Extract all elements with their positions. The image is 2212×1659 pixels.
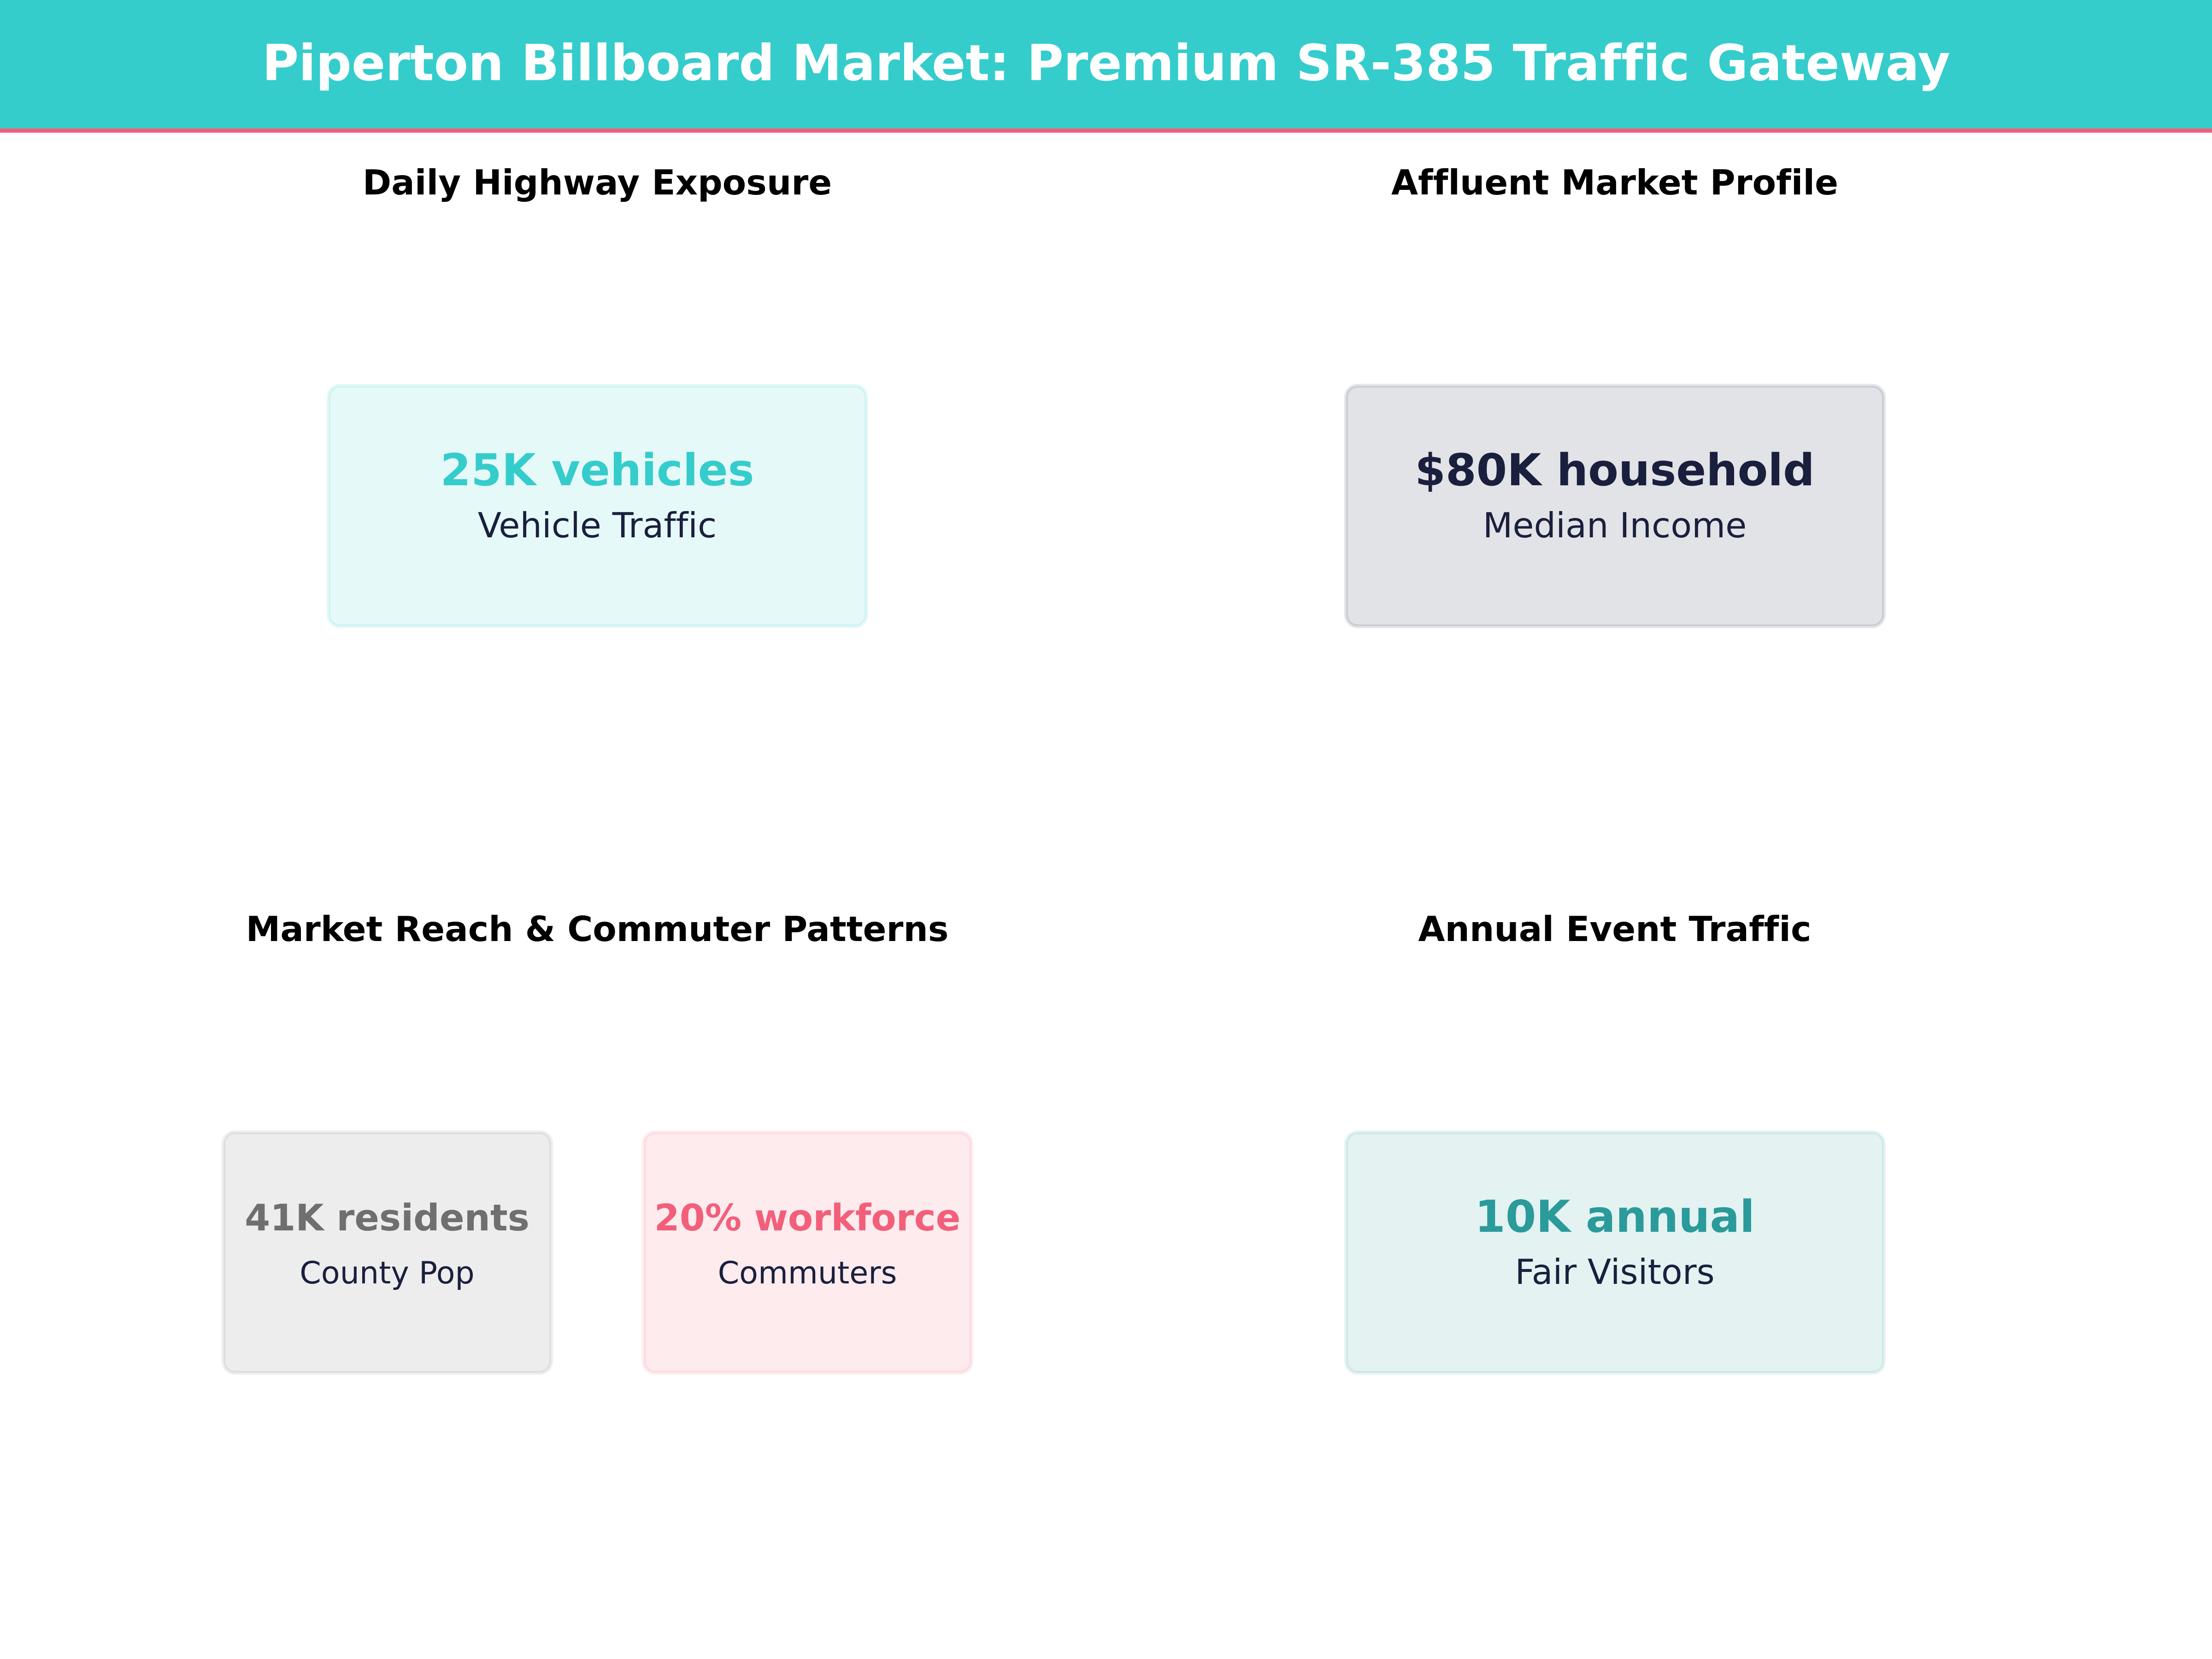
stat card: median income: $80K household bbox=[1415, 444, 1815, 496]
panel: daily highway exposure bbox=[329, 162, 866, 626]
stat card: commuters: Commuters bbox=[718, 1255, 897, 1291]
heading: market reach and commuter patterns: Market Reach & Commuter Patterns bbox=[246, 909, 948, 949]
stat card: county population: 41K residents bbox=[245, 1197, 529, 1239]
stat card: vehicle traffic: 25K vehicles bbox=[440, 444, 754, 496]
stat card: county population: County Pop bbox=[300, 1255, 475, 1291]
stat card: median income bbox=[1346, 386, 1884, 626]
panel: annual event traffic bbox=[1346, 909, 1884, 1373]
stat card: median income: Median Income bbox=[1483, 505, 1747, 546]
panel: affluent market profile bbox=[1346, 162, 1884, 626]
stat card: commuters: 20% workforce bbox=[654, 1197, 960, 1239]
heading: annual event traffic: Annual Event Traffic bbox=[1418, 909, 1811, 949]
stat card: vehicle traffic bbox=[329, 386, 866, 626]
heading: affluent market profile: Affluent Market Profile bbox=[1391, 162, 1838, 203]
header banner bbox=[0, 0, 2212, 133]
stat card: county population bbox=[224, 1132, 551, 1373]
stat card: fair visitors: Fair Visitors bbox=[1515, 1252, 1715, 1292]
stat card: vehicle traffic: Vehicle Traffic bbox=[478, 505, 717, 546]
panel: market reach and commuter patterns bbox=[224, 909, 971, 1373]
stat card: fair visitors bbox=[1346, 1132, 1884, 1373]
heading: daily highway exposure: Daily Highway Exposure bbox=[363, 162, 832, 203]
stat card: commuters bbox=[644, 1132, 971, 1373]
stat card: fair visitors: 10K annual bbox=[1475, 1191, 1755, 1242]
title: Piperton Billboard Market: Premium SR-385 Traffic Gateway bbox=[262, 34, 1950, 92]
